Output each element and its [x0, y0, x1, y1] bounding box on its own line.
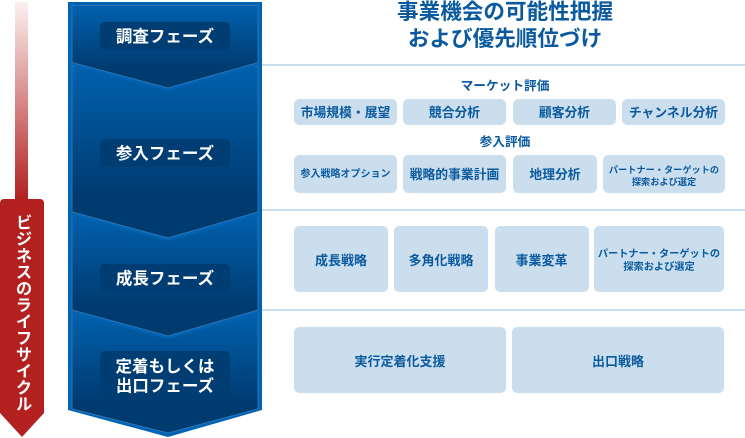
phase: research: 調査フェーズ [116, 26, 215, 46]
title: business opportunity: および優先順位づけ [408, 26, 602, 51]
box: channels [622, 99, 725, 125]
phase: entry: 参入フェーズ [116, 143, 215, 163]
box: partner selection: パートナー・ターゲットの [598, 249, 720, 260]
box: business transformation [494, 226, 588, 292]
phase: exit [68, 300, 262, 437]
box: partner search [603, 155, 725, 193]
box: growth strategy: 成長戦略 [315, 252, 367, 268]
phase: research [68, 2, 262, 91]
box: competition: 競合分析 [429, 105, 480, 120]
box: geographic analysis [513, 155, 597, 193]
phase: exit: 定着もしくは [116, 356, 214, 376]
box: strategic business plan [403, 155, 506, 193]
box: partner selection: 探索および選定 [623, 262, 695, 272]
box: entry strategy options: 参入戦略オプション [300, 169, 390, 180]
box: customers [513, 99, 616, 125]
box: partner selection [594, 226, 724, 292]
box: execution support: 実行定着化支援 [354, 354, 446, 368]
box: strategic business plan: 戦略的事業計画 [410, 167, 499, 182]
heading: entry evaluation: 参入評価 [480, 135, 530, 149]
box: market size [294, 99, 397, 125]
box: business transformation: 事業変革 [515, 252, 568, 268]
box: diversification: 多角化戦略 [408, 252, 474, 268]
phase: exit: 出口フェーズ [116, 376, 215, 396]
box: exit strategy [512, 327, 724, 393]
box: growth strategy [294, 226, 388, 292]
box: exit strategy: 出口戦略 [592, 354, 644, 368]
box: market size: 市場規模・展望 [301, 105, 390, 120]
box: entry strategy options [294, 155, 397, 193]
box: geographic analysis: 地理分析 [529, 167, 581, 182]
heading: market evaluation: マーケット評価 [461, 79, 549, 93]
phase: growth [68, 205, 262, 339]
box: diversification [394, 226, 488, 292]
box: channels: チャンネル分析 [629, 105, 718, 120]
arrow: business lifecycle: ビジネスのライフサイクル [13, 214, 31, 412]
box: customers: 顧客分析 [539, 105, 590, 120]
gradient bar: lifecycle arrow shaft [15, 2, 28, 200]
phase: growth: 成長フェーズ [116, 268, 215, 288]
box: competition [403, 99, 506, 125]
phase: entry [68, 55, 262, 241]
title: business opportunity [397, 0, 613, 51]
arrow: business lifecycle [0, 199, 44, 437]
box: partner search: 探索および選定 [632, 176, 696, 186]
box: execution support [294, 327, 506, 393]
box: partner search: パートナー・ターゲットの [609, 164, 719, 174]
